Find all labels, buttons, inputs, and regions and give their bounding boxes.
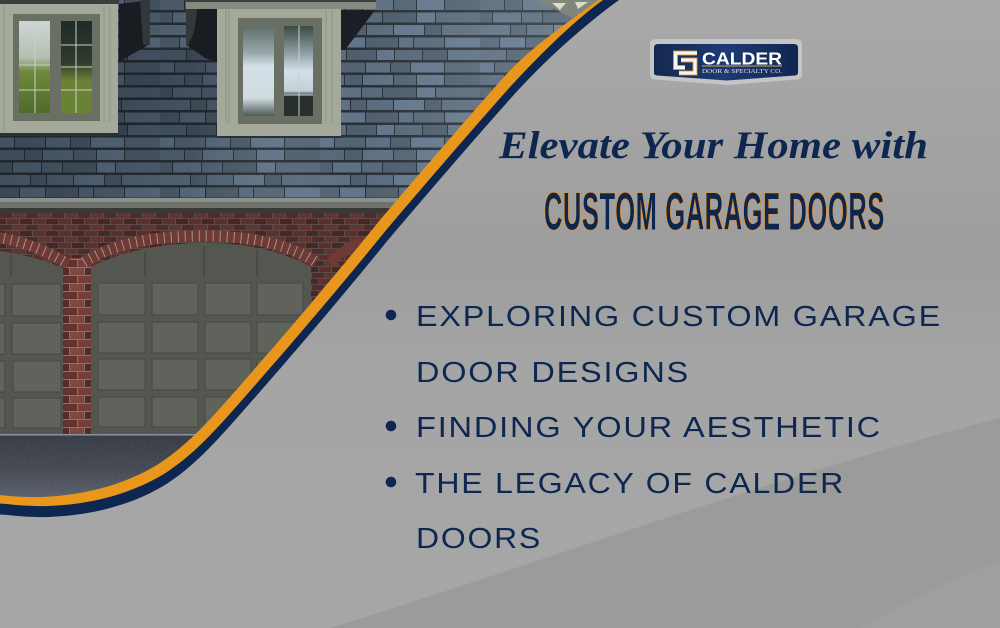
brick arches: [0, 236, 362, 264]
right dormer window: [238, 18, 322, 124]
bullet 2: FINDING YOUR AESTHETIC: [416, 412, 882, 444]
photo: house with garage doors: [0, 0, 640, 505]
driveway: [0, 434, 196, 498]
left dormer: [0, 0, 119, 136]
brick wall: [0, 213, 420, 438]
garage door: left: [0, 251, 63, 434]
bullet 1: EXPLORING CUSTOM GARAGE: [416, 301, 942, 333]
bullet 1: DOOR DESIGNS: [416, 357, 690, 389]
left dormer window: [13, 14, 100, 121]
roof shingles: [0, 0, 640, 200]
logo: Calder Door & Specialty Co.: [650, 39, 802, 85]
dark eaves between dormers: [119, 0, 375, 62]
brick pillar: [63, 258, 91, 436]
curved navy ribbon: [0, 0, 640, 517]
curved orange ribbon: [0, 0, 640, 506]
bullet 1: [386, 301, 942, 389]
bullet 3: THE LEGACY OF CALDER: [415, 468, 845, 500]
logo mark: [676, 53, 697, 73]
garage door: main: [91, 243, 311, 434]
bullet list: [386, 301, 942, 555]
right dormer: [186, 0, 376, 138]
logo tagline: DOOR & SPECIALTY CO.: [702, 68, 782, 75]
heading: Elevate Your Home with: Elevate Your Home with: [498, 124, 928, 167]
bullet 3: [386, 468, 845, 555]
bullet 3: DOORS: [416, 523, 542, 555]
gutter: [0, 198, 420, 213]
logo wordmark: CALDER: [702, 48, 782, 68]
